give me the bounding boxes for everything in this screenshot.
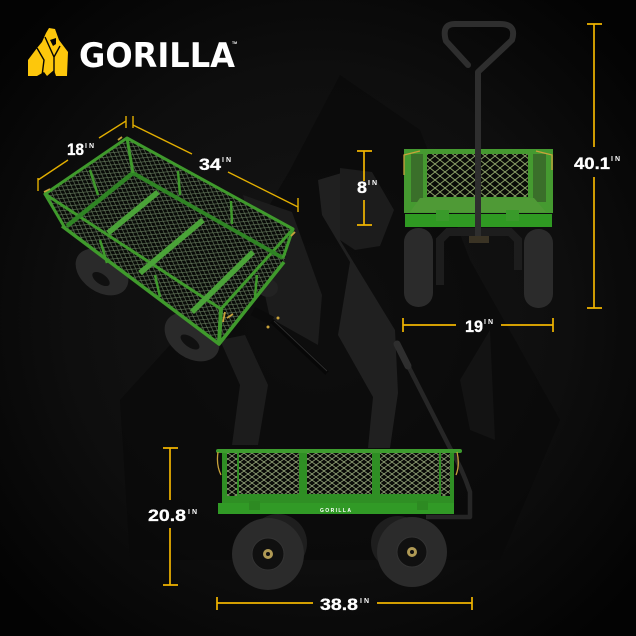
dimension: 8 in: IN <box>368 180 377 187</box>
wheels <box>67 239 278 371</box>
gold latches <box>217 452 458 475</box>
dimension: 34 in: IN <box>222 157 231 164</box>
front view cart <box>404 24 553 308</box>
dimension: 40.1 in <box>574 24 620 308</box>
dimension: 38.8 in: 38.8 <box>320 595 358 614</box>
dimension: 18 in: 18 <box>67 140 84 159</box>
brackets <box>436 210 519 221</box>
floor <box>410 198 546 212</box>
side mesh strips <box>411 154 546 202</box>
wheels <box>232 514 447 590</box>
wordmark: GORILLA <box>79 36 236 76</box>
hitch <box>469 236 489 243</box>
dimension: 40.1 in: 40.1 <box>574 154 610 173</box>
side view cart <box>216 344 470 590</box>
green frame <box>45 138 293 344</box>
dimension: 34 in <box>133 116 298 212</box>
dimension: 38.8 in <box>217 595 472 614</box>
axle frame <box>440 232 518 285</box>
mesh floor and walls <box>45 138 293 344</box>
mesh panels <box>227 453 450 496</box>
dimension: 18 in: IN <box>85 143 94 150</box>
dimension: 19 in: 19 <box>465 317 483 336</box>
handle grip <box>397 344 408 366</box>
logo <box>28 28 237 76</box>
cart body <box>404 149 553 213</box>
dimension: 8 in <box>357 151 377 225</box>
dimension: 18 in <box>38 116 126 191</box>
hinges <box>44 137 295 322</box>
handle <box>397 344 470 517</box>
gorilla face <box>50 38 56 46</box>
deck <box>405 214 552 227</box>
dimension: 20.8 in <box>148 448 197 585</box>
dimension: 20.8 in: 20.8 <box>148 506 186 525</box>
deck logo: GORILLA <box>320 508 351 514</box>
handle <box>445 24 513 238</box>
dimension: 19 in <box>403 317 553 336</box>
dimension: 38.8 in: IN <box>360 598 369 605</box>
dimension: 8 in: 8 <box>357 178 367 197</box>
dimension: 20.8 in: IN <box>188 509 197 516</box>
wheels <box>404 228 553 308</box>
dimension: 19 in: IN <box>484 319 493 326</box>
gold latches <box>404 151 552 175</box>
deck brackets <box>249 501 428 510</box>
dimension: 34 in: 34 <box>199 155 222 174</box>
body panel <box>222 449 454 503</box>
dimension: 40.1 in: IN <box>611 156 620 163</box>
icon: gorilla <box>28 28 68 76</box>
trademark: TM <box>232 41 237 45</box>
pull handle <box>253 311 327 373</box>
deck band <box>218 503 454 514</box>
top rail <box>216 449 462 453</box>
mesh panel <box>427 154 528 197</box>
top view cart <box>44 137 327 373</box>
watermark gorilla <box>120 75 560 560</box>
